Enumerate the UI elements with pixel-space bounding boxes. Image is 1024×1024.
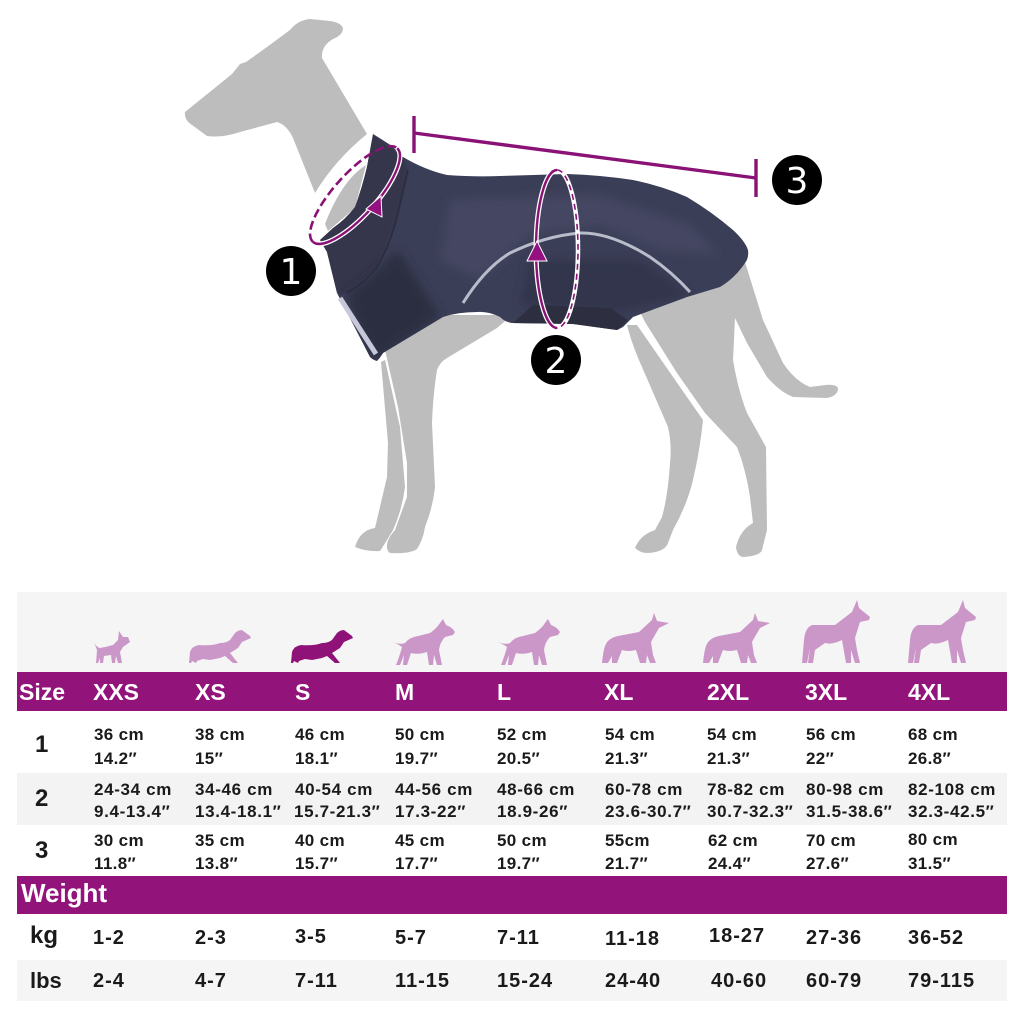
row 2 chest: 60-78 cm xyxy=(605,780,683,799)
row 1 neck: 21.3″ xyxy=(605,749,648,768)
row 3 length: 27.6″ xyxy=(806,854,849,873)
row 2 chest: 24-34 cm xyxy=(94,780,172,799)
weight row kg: 2-3 xyxy=(195,927,227,949)
icon: 3XL dog xyxy=(802,600,870,663)
icon: M dog xyxy=(392,619,455,665)
size header bar: 2XL xyxy=(707,679,749,705)
dog size icons xyxy=(94,600,976,665)
row 1 neck: 54 cm xyxy=(605,725,655,744)
arrow on girth loop xyxy=(527,241,547,261)
row 2 chest: 17.3-22″ xyxy=(395,802,466,821)
weight header bar: Weight xyxy=(21,878,107,908)
row 1 neck: 46 cm xyxy=(295,725,345,744)
row 3 length: 19.7″ xyxy=(497,854,540,873)
row 1 neck: 20.5″ xyxy=(497,749,540,768)
row 2 chest: 32.3-42.5″ xyxy=(908,802,994,821)
row 2 chest: 34-46 cm xyxy=(195,780,273,799)
row 1 neck: 14.2″ xyxy=(94,749,137,768)
weight row lbs: 7-11 xyxy=(295,970,338,992)
row 3 length: 30 cm xyxy=(94,831,144,850)
reflective front strip xyxy=(340,298,376,354)
row 3 length: 11.8″ xyxy=(94,854,136,873)
weight row lbs: 4-7 xyxy=(195,970,227,992)
row 2 chest: 30.7-32.3″ xyxy=(707,802,793,821)
size header bar: XL xyxy=(604,679,633,705)
icon: L dog xyxy=(497,619,560,665)
icon: XL dog xyxy=(602,613,669,663)
size header bar: XS xyxy=(195,679,226,705)
weight row lbs: 15-24 xyxy=(497,970,553,992)
row 1 neck: 68 cm xyxy=(908,725,958,744)
weight row kg: 1-2 xyxy=(93,927,125,949)
row 3 length: 80 cm xyxy=(908,830,958,849)
row 3 length: 13.8″ xyxy=(195,854,238,873)
number badge 1 xyxy=(266,246,316,296)
measurement 1 neck loop xyxy=(297,134,413,256)
weight row kg: 7-11 xyxy=(497,927,540,949)
weight row kg: 5-7 xyxy=(395,927,427,949)
row 1 neck: 36 cm xyxy=(94,725,144,744)
row 3 length: 62 cm xyxy=(708,831,758,850)
row 3 length: 40 cm xyxy=(295,831,345,850)
row 2 chest: 44-56 cm xyxy=(395,780,473,799)
weight row kg: 36-52 xyxy=(908,927,964,949)
icon: XS dog xyxy=(189,630,251,663)
size header bar: 3XL xyxy=(805,679,847,705)
row 3 length: 35 cm xyxy=(195,831,245,850)
measurement 2 girth loop xyxy=(536,170,578,328)
dog silhouette xyxy=(185,19,838,557)
row 3 length: 15.7″ xyxy=(295,854,338,873)
row 1 neck xyxy=(35,725,958,768)
row 3 length: 24.4″ xyxy=(708,854,751,873)
size header bar: M xyxy=(395,679,414,705)
weight row kg: 11-18 xyxy=(605,928,660,950)
size header bar: 4XL xyxy=(908,679,950,705)
row 2 chest: 82-108 cm xyxy=(908,780,996,799)
row 2 chest: 78-82 cm xyxy=(707,780,785,799)
weight row lbs xyxy=(17,960,1007,1001)
row 2 chest: 80-98 cm xyxy=(806,780,884,799)
weight row lbs: 2-4 xyxy=(93,970,125,992)
weight row kg: 18-27 xyxy=(709,925,765,947)
weight row lbs: 79-115 xyxy=(908,970,975,992)
row 1 neck: 26.8″ xyxy=(908,749,951,768)
measurement 3 line xyxy=(414,116,756,197)
row 3 length xyxy=(35,830,958,873)
belly strap xyxy=(512,305,628,331)
row 1 neck: 21.3″ xyxy=(707,749,750,768)
number badge 3: 3 xyxy=(786,161,808,202)
row 3 length: 50 cm xyxy=(497,831,547,850)
row 1 neck: 50 cm xyxy=(395,725,445,744)
icon: 2XL dog xyxy=(703,613,770,663)
row 1 neck: 1 xyxy=(35,731,48,758)
row 1 neck: 19.7″ xyxy=(395,749,438,768)
weight row lbs: 11-15 xyxy=(395,970,450,992)
row 3 length: 21.7″ xyxy=(605,854,648,873)
reflective strip xyxy=(463,233,690,303)
weight row lbs: lbs xyxy=(30,968,62,993)
row 2 chest: 9.4-13.4″ xyxy=(94,802,170,821)
row 3 length: 31.5″ xyxy=(908,854,951,873)
dog coat xyxy=(320,134,748,361)
number badge 2: 2 xyxy=(545,341,567,382)
row 3 length: 70 cm xyxy=(806,831,856,850)
row 1 neck: 22″ xyxy=(806,749,834,768)
weight row lbs: 60-79 xyxy=(806,970,862,992)
size header bar: S xyxy=(295,679,310,705)
measurement diagram xyxy=(185,19,838,557)
row 1 neck: 15″ xyxy=(195,749,223,768)
row 2 chest: 2 xyxy=(35,785,48,812)
row 2 chest: 40-54 cm xyxy=(295,780,373,799)
row 2 chest: 15.7-21.3″ xyxy=(294,802,380,821)
row 2 chest: 48-66 cm xyxy=(497,780,575,799)
coat shading xyxy=(320,134,720,360)
weight row lbs: 40-60 xyxy=(711,970,767,992)
weight header bar xyxy=(17,876,1007,914)
size header bar: Size xyxy=(19,679,65,705)
weight row kg: 3-5 xyxy=(295,926,327,948)
row 2 chest: 18.9-26″ xyxy=(497,802,568,821)
size header bar: XXS xyxy=(93,679,139,705)
row 3 length: 3 xyxy=(35,837,48,864)
row 2 chest xyxy=(17,773,1007,825)
icon: S dog selected xyxy=(291,630,353,663)
row 1 neck: 54 cm xyxy=(707,725,757,744)
size header bar xyxy=(17,672,1007,711)
row 1 neck: 38 cm xyxy=(195,725,245,744)
row 3 length: 45 cm xyxy=(395,831,445,850)
weight row kg: kg xyxy=(30,922,58,949)
number badge 3 xyxy=(772,155,822,205)
row 3 length: 17.7″ xyxy=(395,854,438,873)
collar seam xyxy=(347,170,408,293)
weight row kg xyxy=(30,922,964,950)
row 1 neck: 56 cm xyxy=(806,725,856,744)
number badge 1: 1 xyxy=(280,252,302,293)
icon: 4XL dog xyxy=(908,600,976,663)
number badge 2 xyxy=(531,335,581,385)
row 2 chest: 31.5-38.6″ xyxy=(806,802,892,821)
arrow on neck loop xyxy=(366,196,382,217)
icon strip background xyxy=(17,592,1007,672)
size header bar: L xyxy=(497,679,511,705)
icon: XXS dog xyxy=(94,631,130,663)
row 3 length: 55cm xyxy=(605,831,650,850)
size chart xyxy=(17,592,1007,1001)
row 1 neck: 52 cm xyxy=(497,725,547,744)
row 2 chest: 13.4-18.1″ xyxy=(195,802,281,821)
weight row kg: 27-36 xyxy=(806,927,862,949)
row 1 neck: 18.1″ xyxy=(295,749,338,768)
row 2 chest: 23.6-30.7″ xyxy=(605,802,691,821)
weight row lbs: 24-40 xyxy=(605,970,661,992)
